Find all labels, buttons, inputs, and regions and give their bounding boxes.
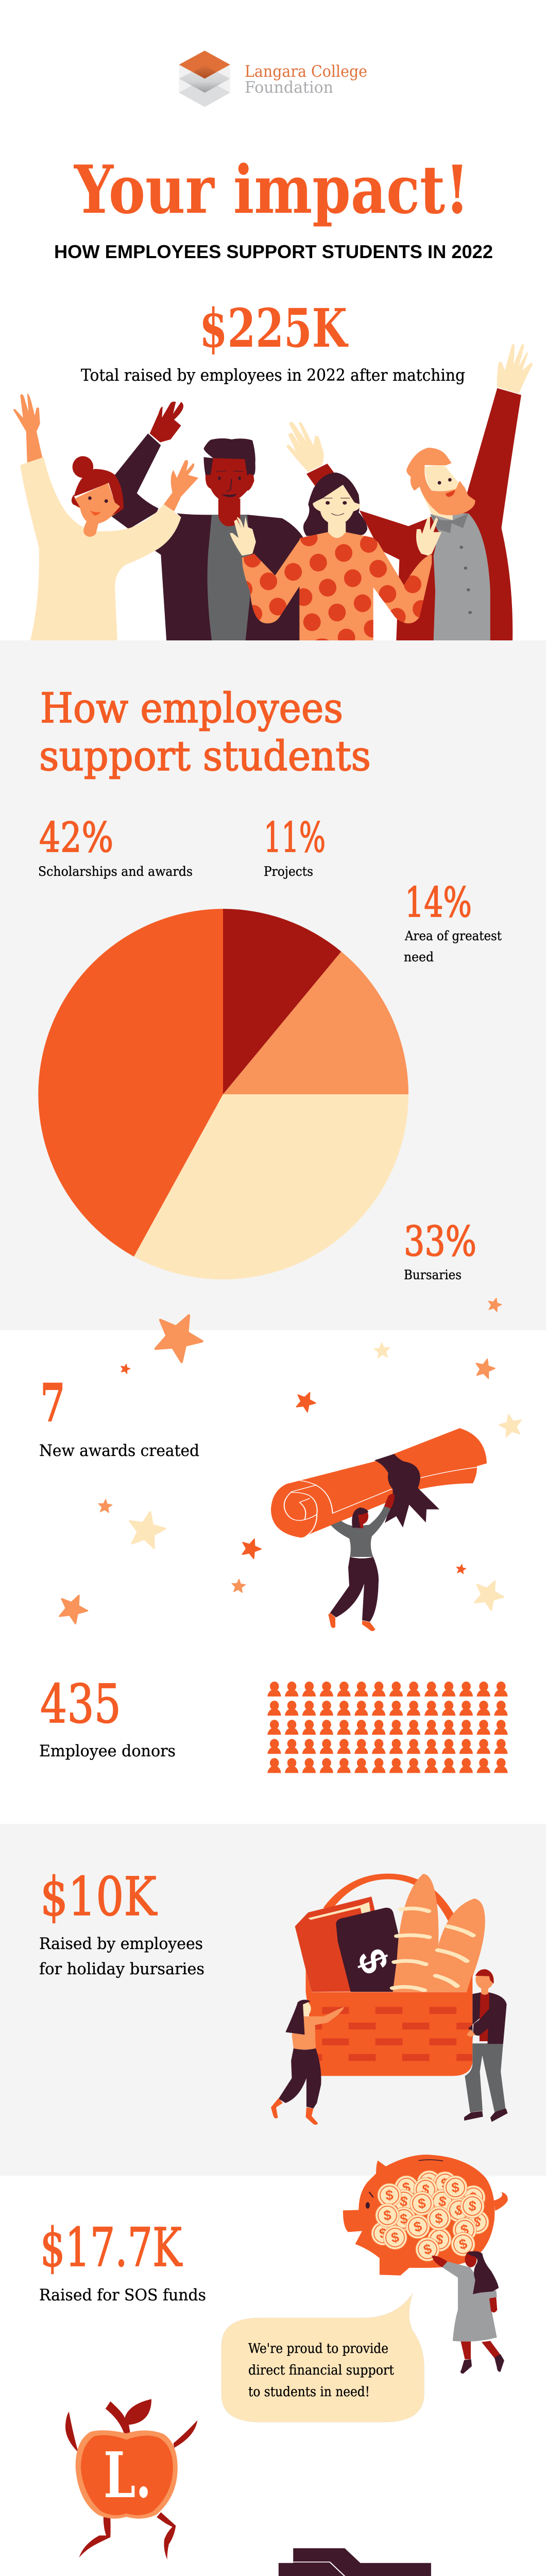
coins: $ — [434, 2210, 443, 2227]
coins: $ — [424, 2174, 434, 2191]
heading: How employees — [40, 684, 343, 732]
stat: 42% scholarships and awards: Scholarships and awards — [38, 864, 193, 879]
pictogram: rows of donors — [267, 1682, 508, 1773]
illustration: person lifting diploma — [271, 1428, 487, 1631]
illustration: people with gift basket — [271, 1874, 508, 2125]
apple legs — [79, 2512, 176, 2560]
pig body — [343, 2155, 508, 2276]
coins: $ — [453, 2201, 465, 2219]
coins: $ — [385, 2187, 394, 2204]
apple body — [76, 2430, 178, 2519]
man holding basket — [464, 1969, 508, 2122]
stat: 14% area of greatest need: 14% — [405, 878, 472, 926]
speech bubble — [221, 2293, 424, 2422]
stat: $17.7K raised: $17.7K — [40, 2217, 183, 2279]
stat: 33% bursaries: Bursaries — [404, 1267, 462, 1282]
apple L. logo: L. — [104, 2438, 151, 2512]
person: woman in cream sweater — [13, 394, 198, 640]
stat: 435 employee donors — [39, 1673, 176, 1760]
coins: $ — [399, 2193, 409, 2210]
stat: 435 employee donors: Employee donors — [39, 1742, 176, 1760]
coins: $ — [401, 2179, 412, 2196]
panel: new awards — [39, 1296, 524, 1773]
basket contents: $ — [348, 1943, 397, 1979]
person lifting — [328, 1494, 395, 1631]
heading — [39, 684, 371, 780]
stat: 11% projects — [264, 814, 326, 879]
folder — [279, 2548, 438, 2576]
logo wordmark: Foundation — [245, 78, 333, 97]
panel: how employees support students — [0, 640, 546, 1330]
stat: $10K raised: $10K — [40, 1866, 158, 1928]
stat: $17.7K raised: Raised for SOS funds — [39, 2286, 206, 2304]
illustration: piggy bank — [343, 2155, 508, 2374]
stat: 42% scholarships and awards: 42% — [39, 814, 113, 861]
stat: 33% bursaries — [404, 1217, 476, 1282]
stat: $17.7K raised — [39, 2217, 206, 2304]
heading: support students — [39, 732, 371, 780]
stat: 11% projects: 11% — [264, 814, 326, 861]
total raised figure: $225K — [199, 297, 349, 360]
stat: 435 employee donors: 435 — [40, 1673, 121, 1735]
coins: $ — [437, 2193, 448, 2210]
logo mark — [179, 50, 230, 107]
basket contents — [295, 1874, 485, 1992]
coins: $ — [451, 2179, 460, 2196]
coins: $ — [383, 2207, 392, 2224]
basket — [306, 1970, 472, 2076]
stat: 7 new awards — [39, 1372, 199, 1460]
apple limbs and stem — [65, 2399, 197, 2452]
stat: 33% bursaries: 33% — [404, 1217, 476, 1265]
stat: $10K raised — [39, 1866, 204, 1978]
logo wordmark: Langara College — [245, 62, 367, 81]
coins: $ — [457, 2236, 469, 2252]
title: Your impact! — [73, 151, 469, 229]
stat: 14% area of greatest need: Area of greatest — [404, 928, 502, 943]
person: woman in dotted sweater — [230, 472, 441, 648]
speech bubble: We're proud to provide — [248, 2341, 388, 2357]
speech bubble: to students in need! — [248, 2384, 370, 2400]
coins: $ — [468, 2189, 479, 2206]
coins: $ — [434, 2231, 445, 2248]
coins: $ — [471, 2214, 483, 2230]
diploma scroll — [271, 1428, 487, 1538]
coins: $ — [412, 2218, 423, 2235]
stat: $10K raised: Raised by employees — [39, 1935, 203, 1953]
total raised caption: Total raised by employees in 2022 after matching — [81, 365, 465, 385]
panel: hero — [13, 50, 533, 648]
stat: 42% scholarships and awards — [38, 814, 193, 879]
coins — [369, 2168, 491, 2264]
coins: $ — [420, 2181, 431, 2198]
coins: $ — [459, 2222, 470, 2238]
coins: $ — [468, 2198, 477, 2214]
speech bubble: direct financial support — [248, 2363, 395, 2378]
logo — [179, 50, 367, 107]
stat: 7 new awards: New awards created — [39, 1442, 199, 1460]
panel: SOS funds — [39, 2155, 508, 2576]
girl lifting pig — [432, 2251, 504, 2374]
coins: $ — [422, 2241, 433, 2258]
panel: holiday bursaries — [0, 1824, 546, 2176]
stat: 14% area of greatest need: need — [404, 950, 434, 964]
coins: $ — [378, 2225, 388, 2242]
coins: $ — [390, 2229, 400, 2246]
stat: 14% area of greatest need — [404, 878, 502, 964]
person: man in dark jacket — [111, 401, 303, 640]
coins: $ — [440, 2175, 450, 2192]
person: bearded man in red — [286, 344, 533, 640]
pie chart — [38, 909, 408, 1279]
woman holding basket — [271, 1999, 344, 2125]
illustration: dancing apple — [65, 2399, 197, 2560]
coins: $ — [417, 2195, 426, 2212]
stat: 7 new awards: 7 — [40, 1372, 65, 1434]
logo wordmark — [245, 62, 367, 97]
coins: $ — [399, 2211, 408, 2227]
stat: 11% projects: Projects — [264, 864, 313, 879]
stat: $10K raised: for holiday bursaries — [39, 1960, 204, 1978]
illustration: four people waving — [13, 344, 533, 648]
illustration: folder, gear and man — [279, 2548, 508, 2576]
subtitle: HOW EMPLOYEES SUPPORT STUDENTS IN 2022 — [54, 241, 493, 262]
decorative stars — [55, 1296, 524, 1626]
